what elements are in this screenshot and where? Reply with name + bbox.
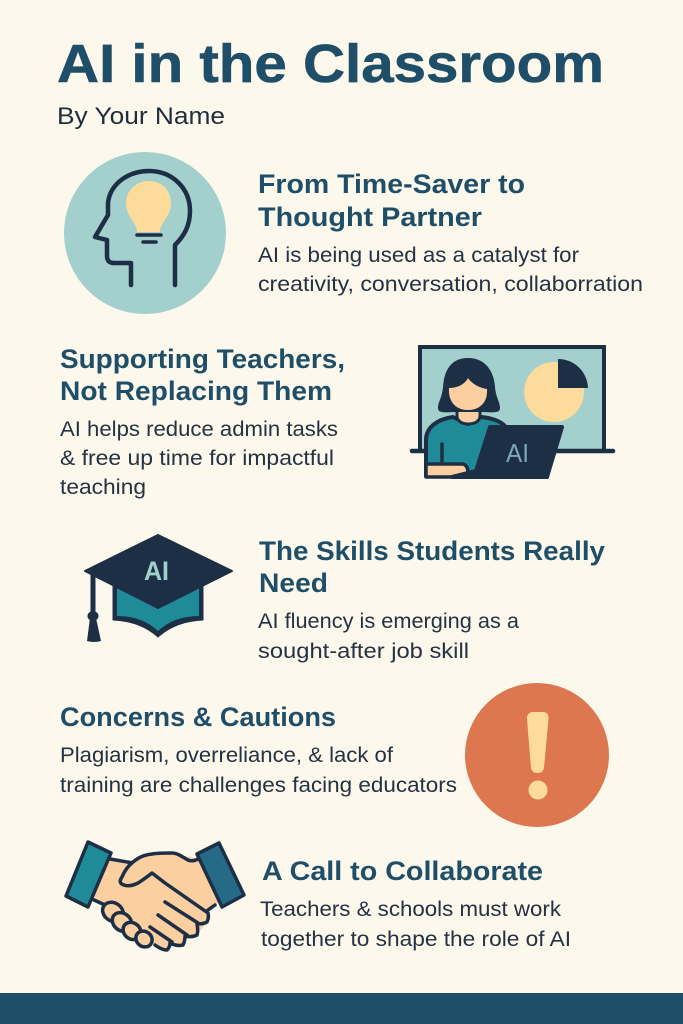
section 3 heading: [259, 536, 605, 598]
section 2 text: teaching: [60, 476, 146, 499]
section 5 text: Teachers & schools must work: [260, 898, 562, 921]
icon: teacher at laptop in front of board: [412, 347, 613, 477]
section 4 text: [60, 744, 457, 797]
section 2 text: & free up time for impactful: [60, 447, 334, 470]
icon: graduation cap: AI: [144, 556, 169, 586]
icon: handshake: [66, 842, 244, 950]
section 4 text: training are challenges facing educators: [60, 774, 457, 797]
section 1 heading: From Time-Saver to: [258, 169, 525, 199]
section 4 text: Plagiarism, overreliance, & lack of: [60, 744, 393, 767]
icon: exclamation circle: [465, 683, 609, 827]
icon: teacher at laptop in front of board: AI: [506, 438, 529, 468]
footer bar: [0, 993, 683, 1024]
section 3 heading: The Skills Students Really: [259, 536, 605, 566]
section 5 heading: A Call to Collaborate: [262, 856, 543, 886]
section 2 text: AI helps reduce admin tasks: [60, 418, 338, 441]
section 1 heading: [258, 169, 525, 232]
byline: By Your Name: [57, 103, 225, 130]
icon: graduation cap: [85, 535, 232, 642]
section 2 text: [60, 418, 338, 499]
section 1 text: creativity, conversation, collaborration: [258, 273, 643, 296]
section 2 heading: Not Replacing Them: [60, 376, 332, 406]
section 2 heading: [60, 344, 345, 406]
section 2 heading: Supporting Teachers,: [60, 344, 345, 374]
section 3 heading: Need: [259, 568, 328, 598]
title: AI in the Classroom: [57, 34, 604, 94]
section 5 text: together to shape the role of AI: [261, 928, 571, 951]
section 5 text: [260, 898, 571, 951]
section 3 text: sought-after job skill: [258, 640, 469, 663]
section 3 text: [258, 610, 519, 663]
icon: head with lightbulb: [64, 152, 226, 314]
section 1 text: AI is being used as a catalyst for: [258, 244, 579, 267]
section 1 text: [258, 244, 643, 296]
section 4 heading: Concerns & Cautions: [60, 702, 336, 732]
section 1 heading: Thought Partner: [258, 202, 483, 232]
section 3 text: AI fluency is emerging as a: [258, 610, 519, 633]
